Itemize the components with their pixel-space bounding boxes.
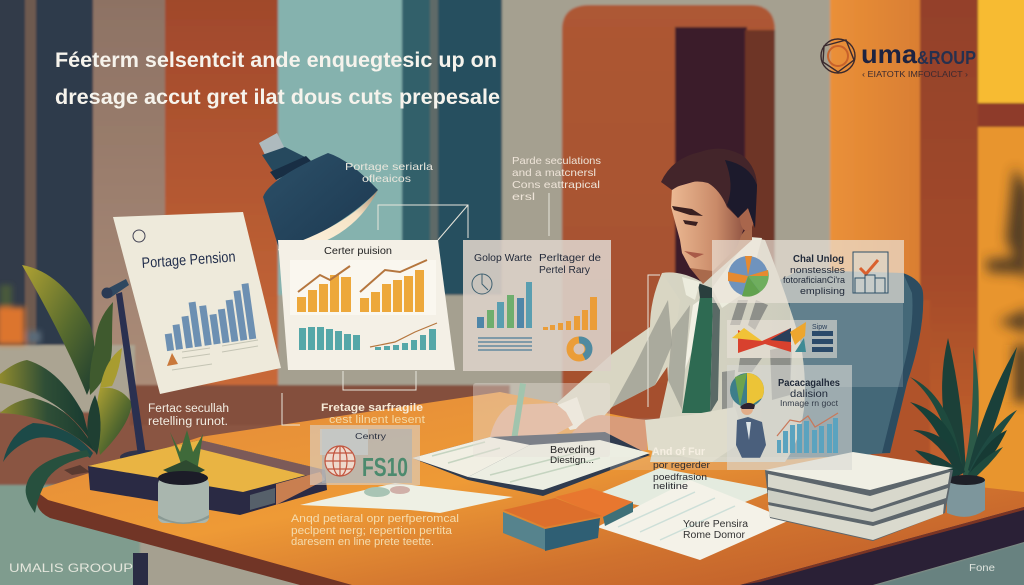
book under lamp <box>88 440 327 515</box>
FS10 mark: FS10 <box>362 452 408 482</box>
panel caption: Inmage rn goct <box>780 398 839 408</box>
connector: man to desk <box>648 275 660 407</box>
man sitting at desk <box>490 149 923 462</box>
panel text line: emplising <box>800 286 845 296</box>
collar <box>682 277 700 300</box>
right cuff <box>645 407 745 462</box>
callout: Portage seriarla: Portage seriarla <box>345 161 433 173</box>
connector lines <box>282 193 549 425</box>
trend lines <box>298 260 427 292</box>
callout: Fretage sarfragile: cest lilnent lesent <box>329 414 425 426</box>
callout: Fretage sarfragile: Fretage sarfragile <box>321 402 423 414</box>
logo <box>821 39 976 79</box>
sleeve <box>557 273 680 432</box>
teal bars with trend <box>777 418 838 453</box>
icon: paper seal <box>133 230 145 242</box>
glass panel: desk overlay <box>473 383 850 470</box>
tie knot <box>698 283 712 298</box>
title: dresage accut gret ilat dous cuts prepesale <box>55 86 500 109</box>
desk lamp <box>102 133 378 464</box>
glass panel: Golop Warte <box>463 240 611 371</box>
icon: calendar check <box>853 252 888 293</box>
logo wordmark: uma <box>861 39 918 69</box>
paper: Portage Pension report <box>113 212 281 394</box>
neck <box>690 222 752 284</box>
donut chart <box>570 340 589 358</box>
blue bar chart <box>159 283 256 351</box>
text block: Anqd petiaral: Anqd petiaral opr perfperomcal <box>291 513 459 525</box>
panel heading right line two: Pertel Rary <box>539 265 590 276</box>
callout: Fretage sarfragile <box>321 402 425 426</box>
panel heading: Chal Unlog <box>793 254 844 265</box>
callout: And of Fur: And of Fur <box>652 446 706 458</box>
text block: Anqd petiaral: daresem en line prete teette. <box>291 536 434 548</box>
orange bars <box>543 297 597 330</box>
figure in suit <box>736 403 766 458</box>
shirt folds <box>722 300 792 420</box>
writing hand <box>490 403 573 442</box>
text block: Anqd petiaral: peclpent nerg; repertion pertita <box>291 525 453 537</box>
chart heading: Certer puision <box>324 246 392 257</box>
paper label: Youre Pensira <box>683 519 748 541</box>
green tie <box>682 297 713 413</box>
footer note: Fone <box>969 563 995 574</box>
callout: Fertac secullah: Fertac secullah <box>148 403 229 415</box>
paper heading: Portage Pension <box>141 248 236 272</box>
mouth <box>684 251 704 258</box>
panel heading left: Golop Warte <box>474 253 532 264</box>
green pen <box>511 383 526 448</box>
paper label: Youre Pensira: Youre Pensira <box>683 519 748 530</box>
teal bars <box>299 327 436 350</box>
cuff <box>553 397 587 430</box>
succulent in pot <box>158 430 209 524</box>
torso <box>650 237 805 462</box>
open notebook <box>412 432 650 496</box>
ear <box>740 205 754 231</box>
text block: Anqd petiaral <box>291 513 459 548</box>
panel heading line two: dalision <box>790 389 828 400</box>
callout: Parde seculations: Cons eattrapical <box>512 179 600 191</box>
resting hand <box>563 415 647 457</box>
logo wordmark end: &ROUP <box>917 48 976 68</box>
paper: Certer puision chart <box>278 240 455 370</box>
panel label: Beveding <box>550 445 595 456</box>
callout: Portage seriarla <box>345 161 433 185</box>
panel heading: Pacacagalhes <box>778 378 840 389</box>
glass panel: bow chart <box>727 320 837 358</box>
callout: Fertac secullah <box>148 403 229 428</box>
callout: Fertac secullah: retelling runot. <box>148 416 228 428</box>
callout: Parde seculations: and a matcnersl <box>512 167 596 179</box>
pie above figure <box>730 373 764 408</box>
footer brand: UMALIS GROOUP <box>9 563 133 575</box>
paper small lines <box>172 340 258 370</box>
panel text line: fotoraficianCi'ra <box>783 275 845 285</box>
face <box>671 180 747 271</box>
eyebrow and eye <box>672 206 703 226</box>
icon: globe <box>325 446 355 476</box>
logo tagline: ‹ EIATOTK IMFOCLAICT › <box>862 70 968 79</box>
callout: And of Fur: nelitine <box>653 481 688 492</box>
plant pot <box>947 480 985 517</box>
glass panel: Chal Unlog <box>712 240 904 387</box>
blurred foreground leaves <box>985 167 1024 402</box>
panel label line two: Diestign... <box>550 455 594 466</box>
trend line <box>777 413 838 436</box>
torso shadow <box>668 305 690 410</box>
chair <box>780 270 923 460</box>
closed books <box>503 488 633 551</box>
icon: warning triangle <box>167 353 178 366</box>
title <box>55 49 500 109</box>
list bars <box>812 331 833 352</box>
sleeve shadow <box>612 300 672 407</box>
callout: Portage seriarla: ofleaicos <box>362 173 411 185</box>
callout: And of Fur: por regerder <box>653 460 710 471</box>
white paper stack <box>765 452 953 541</box>
panel heading right: Perltager de <box>539 253 601 264</box>
icon: teal wedge <box>795 338 806 352</box>
orange bars <box>297 270 424 312</box>
placket <box>684 300 700 372</box>
callout: Parde seculations: ersl <box>512 191 535 203</box>
label: Sipw <box>812 324 828 331</box>
legend lines <box>478 338 532 350</box>
teal trend line <box>370 323 437 347</box>
panel: FS10 badge <box>310 425 420 485</box>
pie chart <box>728 256 769 297</box>
chair edge <box>882 273 923 453</box>
right plant <box>910 338 1017 517</box>
callout: And of Fur <box>652 446 710 492</box>
icon: background plant pot <box>0 285 41 345</box>
small label: Centry <box>355 432 386 441</box>
green and blue bars <box>477 282 532 328</box>
bow chart <box>738 328 791 353</box>
tie shadow <box>710 297 720 413</box>
title: Féeterm selsentcit ande enquegtesic up on <box>55 49 497 72</box>
hair <box>661 149 757 228</box>
callout: Parde seculations <box>512 155 601 203</box>
glass panel: Pacacagalhes <box>727 365 852 470</box>
orange office desk <box>36 392 1024 585</box>
paper label: Youre Pensira: Rome Domor <box>683 530 746 541</box>
panel text line: nonstessles <box>790 265 846 275</box>
callout: And of Fur: poedfrasion <box>653 472 707 483</box>
logo ring mark <box>821 39 855 73</box>
left plant <box>0 265 132 513</box>
papers on desk <box>300 468 790 560</box>
callout: Parde seculations: Parde seculations <box>512 155 601 167</box>
icon: clock <box>472 274 492 294</box>
dark hair side <box>725 160 757 228</box>
icon: yellow wedge <box>790 322 806 345</box>
